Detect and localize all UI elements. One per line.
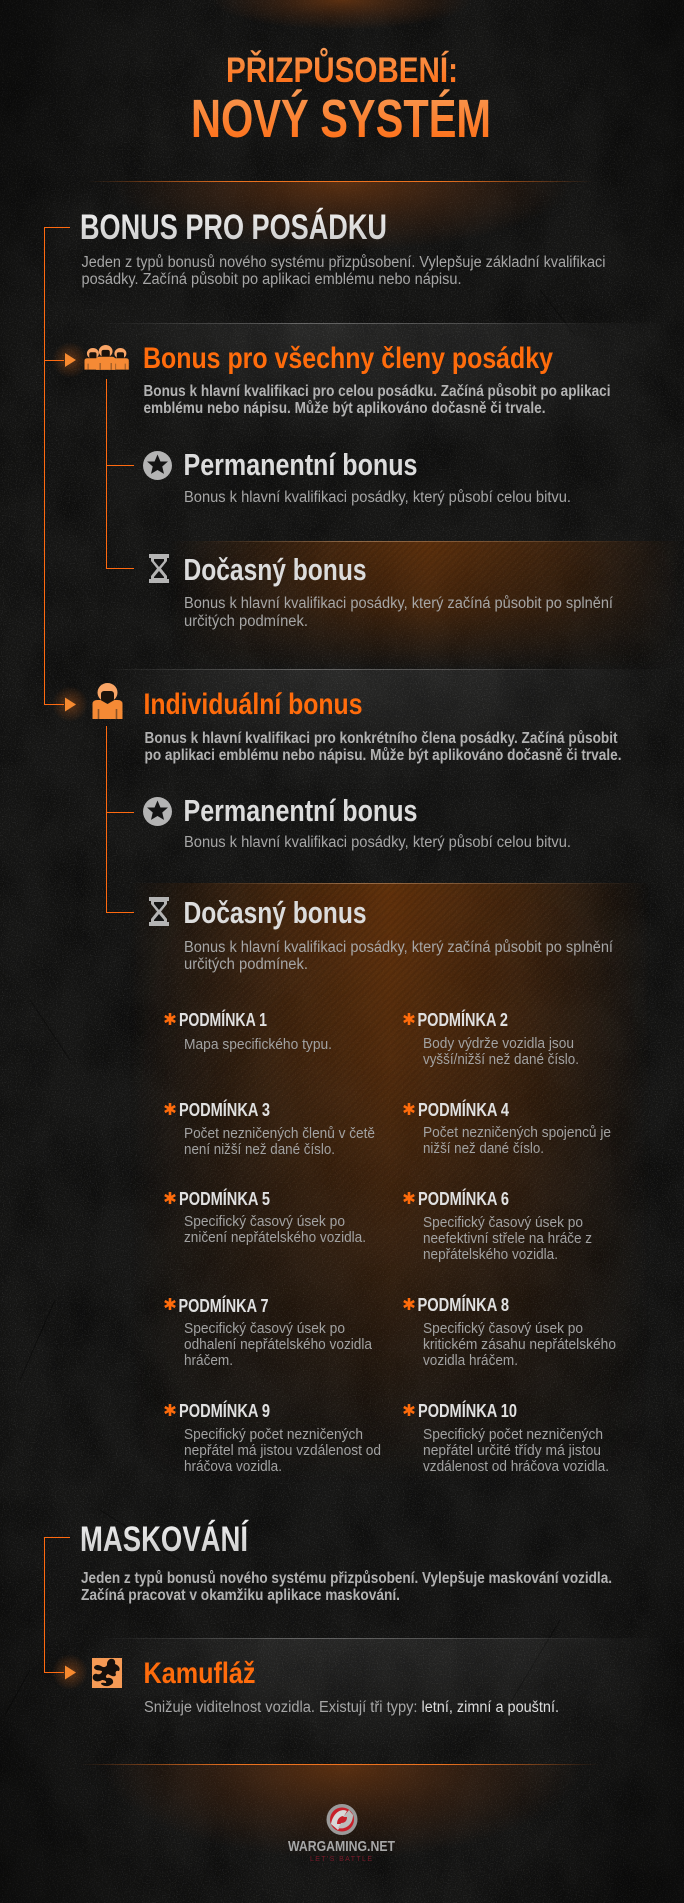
condition 3 <box>165 1099 375 1158</box>
panel: individual bonus backdrop <box>120 669 598 743</box>
arrow: to camouflage <box>52 1654 88 1690</box>
text: temporary bonus description <box>184 939 614 973</box>
heading: bonus for all crew: Bonus pro všechny členy posádky <box>143 342 553 375</box>
connector: individual sub-bonuses <box>106 726 134 912</box>
condition 5: PODMÍNKA 5 <box>179 1188 270 1209</box>
icon: crew <box>84 345 129 370</box>
title <box>191 47 491 149</box>
condition 6: PODMÍNKA 6 <box>418 1188 509 1209</box>
arrow: to individual bonus <box>52 686 88 722</box>
heading: camouflage section: MASKOVÁNÍ <box>80 1519 249 1559</box>
condition 10: Specifický počet nezničených <box>423 1426 603 1443</box>
condition 1 <box>165 1009 332 1053</box>
text: permanent bonus description: Bonus k hlavní kvalifikaci posádky, který působí celou bitvu. <box>184 489 571 506</box>
heading: temporary bonus: Dočasný bonus <box>184 895 366 930</box>
icon: hourglass <box>149 554 169 583</box>
title: NOVÝ SYSTÉM <box>191 89 491 149</box>
text: camouflage section description: Začíná pracovat v okamžiku aplikace maskování. <box>81 1587 400 1604</box>
heading: individual bonus: Individuální bonus <box>144 688 362 721</box>
condition 8 <box>404 1294 616 1369</box>
icon: camouflage <box>92 1658 122 1688</box>
condition 3: není nižší než dané číslo. <box>184 1141 335 1158</box>
heading: camouflage: Kamufláž <box>144 1657 256 1690</box>
icon: hourglass <box>149 897 169 926</box>
text: individual bonus description: po aplikaci emblému nebo nápisu. Může být aplikováno dočasně či trvale. <box>144 747 622 764</box>
condition 1: PODMÍNKA 1 <box>179 1009 267 1030</box>
heading: temporary bonus: Dočasný bonus <box>184 552 366 587</box>
text: individual bonus description: Bonus k hlavní kvalifikaci pro konkrétního člena posádky. Začíná působit <box>144 730 618 747</box>
condition 6: nepřátelského vozidla. <box>423 1246 558 1263</box>
text: camouflage section description <box>81 1570 612 1604</box>
arrow: to crew-wide bonus <box>52 342 88 378</box>
panel: camouflage backdrop <box>120 1638 598 1704</box>
condition 7 <box>165 1295 373 1369</box>
title: PŘIZPŮSOBENÍ: <box>226 47 458 90</box>
icon: star <box>143 451 172 480</box>
panel: crew-wide bonus backdrop <box>120 323 598 397</box>
text: camouflage description: Snižuje viditelnost vozidla. Existují tři typy: <box>144 1699 418 1716</box>
condition 9: hráčova vozidla. <box>184 1458 282 1475</box>
text: bonus for all crew description <box>144 383 610 417</box>
condition 2: Body výdrže vozidla jsou <box>423 1035 574 1052</box>
condition 1: Mapa specifického typu. <box>184 1036 332 1053</box>
condition 7: PODMÍNKA 7 <box>178 1295 268 1316</box>
condition 9 <box>165 1400 381 1475</box>
condition 5: Specifický časový úsek po <box>184 1213 345 1230</box>
condition 6: Specifický časový úsek po <box>423 1214 583 1231</box>
text: temporary bonus description: určitých podmínek. <box>184 956 308 973</box>
text: camouflage section description: Jeden z typů bonusů nového systému přizpůsobení. Vylepšuje maskování vozidla. <box>81 1570 612 1587</box>
condition 3: PODMÍNKA 3 <box>179 1099 270 1120</box>
panel: temporary bonus orange backdrop <box>198 541 658 660</box>
condition 8: PODMÍNKA 8 <box>418 1294 509 1315</box>
text: temporary bonus description: Bonus k hlavní kvalifikaci posádky, který začíná působit po splnění <box>184 595 614 612</box>
condition 9: Specifický počet nezničených <box>184 1426 363 1443</box>
condition 6: neefektivní střele na hráče z <box>423 1230 592 1247</box>
main connector: camouflage section <box>44 1538 70 1672</box>
heading: permanent bonus: Permanentní bonus <box>184 793 418 828</box>
condition 2: PODMÍNKA 2 <box>418 1009 508 1030</box>
divider with glow <box>86 1764 594 1846</box>
condition 8: vozidla hráčem. <box>423 1352 518 1369</box>
condition 4: Počet nezničených spojenců je <box>423 1124 611 1141</box>
text: permanent bonus description: Bonus k hlavní kvalifikaci posádky, který působí celou bitvu. <box>184 834 571 851</box>
condition 7: hráčem. <box>184 1352 233 1369</box>
condition 9: nepřátel má jistou vzdálenost od <box>184 1442 381 1459</box>
condition 10 <box>404 1400 609 1475</box>
text: camouflage description: letní, zimní a pouštní. <box>422 1699 559 1716</box>
text: crew bonus description: posádky. Začíná působit po aplikaci emblému nebo nápisu. <box>82 271 462 288</box>
text: temporary bonus description <box>184 595 614 630</box>
condition 3: Počet nezničených členů v četě <box>184 1125 375 1142</box>
logo: Wargaming.net: LET'S BATTLE <box>310 1856 372 1863</box>
text: bonus for all crew description: Bonus k hlavní kvalifikaci pro celou posádku. Začíná působit po aplikaci <box>144 383 610 400</box>
heading: crew bonus: BONUS PRO POSÁDKU <box>80 207 387 247</box>
condition 7: odhalení nepřátelského vozidla <box>184 1336 373 1353</box>
condition 8: Specifický časový úsek po <box>423 1320 583 1337</box>
logo: Wargaming.net: WARGAMING.NET <box>288 1838 395 1855</box>
text: camouflage description <box>144 1699 559 1716</box>
condition 5 <box>165 1188 366 1246</box>
condition 7: Specifický časový úsek po <box>184 1320 345 1337</box>
condition 4: nižší než dané číslo. <box>423 1140 544 1157</box>
icon: person <box>92 683 122 719</box>
icon: star <box>143 797 172 826</box>
connector: crew sub-bonuses <box>106 379 134 568</box>
text: temporary bonus description: Bonus k hlavní kvalifikaci posádky, který začíná působit po splnění <box>184 939 614 956</box>
logo: Wargaming.net <box>288 1804 395 1863</box>
text: temporary bonus description: určitých podmínek. <box>184 613 308 630</box>
condition 4 <box>404 1099 611 1157</box>
text: individual bonus description <box>144 730 622 764</box>
text: bonus for all crew description: emblému nebo nápisu. Může být aplikováno dočasně či trvale. <box>144 400 546 417</box>
text: crew bonus description: Jeden z typů bonusů nového systému přizpůsobení. Vylepšuje základní kvalifikaci <box>82 254 606 271</box>
condition 4: PODMÍNKA 4 <box>418 1099 509 1120</box>
heading: permanent bonus: Permanentní bonus <box>184 447 418 482</box>
text: crew bonus description <box>82 254 606 288</box>
main connector: crew section <box>44 228 70 704</box>
condition 6 <box>404 1188 592 1263</box>
condition 2: vyšší/nižší než dané číslo. <box>423 1051 579 1068</box>
divider with glow <box>93 181 587 242</box>
condition 2 <box>404 1009 579 1068</box>
panel: conditions orange backdrop <box>156 883 634 1422</box>
condition 10: PODMÍNKA 10 <box>418 1400 517 1421</box>
condition 8: kritickém zásahu nepřátelského <box>423 1336 616 1353</box>
condition 10: nepřátel určité třídy má jistou <box>423 1442 601 1459</box>
condition 9: PODMÍNKA 9 <box>179 1400 270 1421</box>
condition 10: vzdálenost od hráčova vozidla. <box>423 1458 609 1475</box>
condition 5: zničení nepřátelského vozidla. <box>184 1229 366 1246</box>
